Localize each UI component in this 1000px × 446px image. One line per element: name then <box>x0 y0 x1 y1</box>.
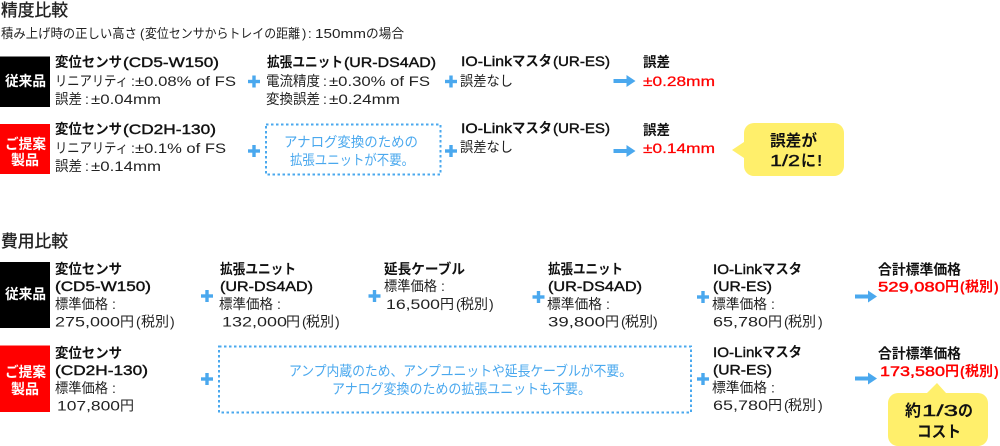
text: IO-Link master price: 標準価格 <box>712 296 767 312</box>
text: measurement condition: 積み上げ時の正しい高さ <box>1 26 137 41</box>
text: IO-Link master: マスタ <box>512 53 552 69</box>
text: extension cable price <box>384 261 494 312</box>
label: conventional product: 従来品 <box>5 73 46 89</box>
text: sensor CD5-W150: 誤差 <box>55 91 82 107</box>
callout: error halved: 1/2 <box>770 153 800 170</box>
callout: about one third of the cost: 約 <box>905 402 921 420</box>
text: expansion unit price <box>219 261 340 330</box>
text: sensor price: ) <box>170 314 175 330</box>
panel: cost, conventional row <box>0 261 999 330</box>
text: sensor price: 変位センサ <box>55 345 122 361</box>
text: sensor CD2H-130: 変位センサ <box>55 121 122 137</box>
text: sensor CD2H-130: リニアリティ <box>55 140 128 156</box>
result: total price 173,580: ) <box>994 363 999 379</box>
icon: plus <box>445 145 457 157</box>
result: total price 529,080: 税別 <box>965 278 993 294</box>
result: total price 529,080: 529,080 <box>878 278 945 294</box>
callout: about one third of the cost: 1/3 <box>922 403 958 420</box>
icon: arrow <box>855 290 877 302</box>
text: IO-Link master price: マスタ <box>762 344 802 360</box>
text: expansion unit price: 円 <box>605 314 619 330</box>
text: sensor CD5-W150: リニアリティ <box>55 73 128 89</box>
text: IO-Link master price: : <box>771 296 775 312</box>
label: proposed product: ご提案 <box>5 136 46 152</box>
text: expansion unit price: ( <box>621 314 626 330</box>
text: sensor price: (CD5-W150) <box>55 278 151 294</box>
label: conventional product <box>0 262 50 328</box>
icon: plus <box>368 290 380 302</box>
text: sensor price: 標準価格 <box>55 380 108 396</box>
text: expansion unit UR-DS4AD: : <box>323 73 327 89</box>
icon: plus <box>445 76 457 88</box>
text: expansion unit UR-DS4AD <box>266 54 436 107</box>
text: sensor CD2H-130: 誤差 <box>55 158 82 174</box>
text: sensor CD2H-130: ±0.1% of FS <box>135 140 226 156</box>
text: extension cable price: 円 <box>440 296 454 312</box>
text: expansion unit UR-DS4AD: (UR-DS4AD) <box>344 54 436 70</box>
text: sensor CD2H-130: ±0.14mm <box>91 158 161 174</box>
text: sensor price: (CD2H-130) <box>55 362 148 378</box>
text: IO-Link master: IO-Link <box>461 120 513 136</box>
text: sensor CD5-W150: (CD5-W150) <box>123 54 219 70</box>
text: IO-Link master price: 円 <box>768 397 782 413</box>
result: total price 529,080: 円 <box>945 278 959 294</box>
result: total price 529,080 <box>878 262 999 294</box>
text: IO-Link master: (UR-ES) <box>553 53 610 69</box>
text: IO-Link master price <box>712 261 823 330</box>
text: measurement condition: 150mm <box>315 26 366 41</box>
result: error 0.14mm <box>643 122 715 156</box>
result: total price 173,580: 円 <box>945 363 959 379</box>
callout: about one third of the cost: コスト <box>917 424 961 441</box>
text: expansion unit price: (UR-DS4AD) <box>220 278 313 294</box>
text: sensor price: 円 <box>120 314 134 330</box>
text: IO-Link master price: 標準価格 <box>712 380 767 396</box>
text: sensor CD5-W150: ±0.04mm <box>91 91 161 107</box>
icon: plus <box>697 291 709 303</box>
result: total price 173,580: 税別 <box>965 363 993 379</box>
text: sensor price: 107,800 <box>57 398 120 414</box>
text: extension cable price: 標準価格 <box>384 278 437 294</box>
text: IO-Link master price: ) <box>818 397 823 413</box>
text: expansion unit price: 39,800 <box>548 314 605 330</box>
result: total price 173,580 <box>878 346 999 379</box>
label: conventional product: 従来品 <box>5 286 46 302</box>
text: IO-Link master: 誤差なし <box>460 139 513 155</box>
text: expansion unit price: ( <box>302 314 307 330</box>
text: IO-Link master: 誤差なし <box>460 73 513 89</box>
text: IO-Link master: マスタ <box>512 120 552 136</box>
result: total price 173,580: 合計標準価格 <box>878 346 961 362</box>
text: sensor CD2H-130 <box>55 121 226 174</box>
text: IO-Link master <box>460 53 610 89</box>
result: total price 529,080: ( <box>960 278 965 294</box>
icon: arrow <box>855 372 877 384</box>
callout: amp unit and cable not required: アナログ変換のための拡張ユニットも不要。 <box>332 381 591 397</box>
callout: about one third of the cost <box>888 383 988 446</box>
callout: error halved: 誤差が <box>770 131 817 150</box>
result: error 0.14mm: ±0.14mm <box>643 140 715 156</box>
text: sensor CD5-W150: : <box>85 91 89 107</box>
text: sensor CD2H-130: : <box>85 158 89 174</box>
text: measurement condition: 変位センサからトレイの距離 <box>145 26 300 41</box>
text: expansion unit UR-DS4AD: ±0.24mm <box>329 91 400 107</box>
result: error 0.14mm: 誤差 <box>643 122 670 138</box>
text: expansion unit price: 132,000 <box>222 314 287 330</box>
text: sensor CD2H-130: : <box>131 140 135 156</box>
text: expansion unit price: (UR-DS4AD) <box>548 278 642 294</box>
text: expansion unit UR-DS4AD: 拡張ユニット <box>267 54 343 70</box>
text: expansion unit price: ) <box>653 314 658 330</box>
text: sensor CD5-W150 <box>55 54 236 107</box>
callout: expansion unit not required <box>266 124 440 174</box>
text: sensor price <box>55 261 175 330</box>
text: sensor CD5-W150: : <box>131 73 135 89</box>
text: expansion unit price: 円 <box>286 314 300 330</box>
icon: plus <box>201 290 213 302</box>
label: proposed product: 製品 <box>11 381 39 397</box>
text: expansion unit price: : <box>277 296 281 312</box>
text: sensor CD5-W150: 変位センサ <box>55 54 122 70</box>
text: IO-Link master: (UR-ES) <box>553 120 610 136</box>
icon: arrow <box>614 145 636 157</box>
text: sensor CD5-W150: ±0.08% of FS <box>135 73 236 89</box>
callout: error halved: ! <box>817 153 822 170</box>
text: expansion unit UR-DS4AD: 変換誤差 <box>266 91 320 107</box>
icon: arrow <box>614 75 636 87</box>
callout: expansion unit not required: 拡張ユニットが不要。 <box>290 152 414 168</box>
text: expansion unit UR-DS4AD: 電流精度 <box>266 73 320 89</box>
text: extension cable price: : <box>441 278 445 294</box>
text: measurement condition: : <box>308 26 312 41</box>
text: IO-Link master price: (UR-ES) <box>713 278 772 294</box>
text: sensor price: : <box>112 296 116 312</box>
text: expansion unit price: 標準価格 <box>219 296 273 312</box>
result: total price 173,580: ( <box>960 363 965 379</box>
text: IO-Link master price: ( <box>784 314 789 330</box>
text: IO-Link master price: IO-Link <box>713 344 763 360</box>
text: IO-Link master price: (UR-ES) <box>713 362 772 378</box>
callout: error halved <box>732 123 844 176</box>
text: extension cable price: 税別 <box>460 296 488 312</box>
heading: cost comparison: 費用比較 <box>1 232 68 251</box>
text: IO-Link master price: マスタ <box>762 261 802 277</box>
text: IO-Link master price: 65,780 <box>713 314 768 330</box>
callout: amp unit and cable not required <box>219 346 691 412</box>
callout: error halved: に <box>801 153 816 170</box>
text: sensor price: 円 <box>120 398 134 414</box>
text: extension cable price: 延長ケーブル <box>384 261 465 277</box>
text: sensor CD2H-130: (CD2H-130) <box>123 121 216 137</box>
text: sensor price: 税別 <box>141 314 169 330</box>
text: expansion unit price: 税別 <box>625 314 653 330</box>
text: IO-Link master price: IO-Link <box>713 261 763 277</box>
text: sensor price <box>55 345 148 414</box>
text: IO-Link master price: ( <box>784 397 789 413</box>
callout: expansion unit not required: アナログ変換のための <box>284 134 418 150</box>
label: proposed product <box>0 124 50 174</box>
callout: amp unit and cable not required: アンプ内蔵のため、アンプユニットや延長ケーブルが不要。 <box>289 363 632 379</box>
text: IO-Link master price: ) <box>818 314 823 330</box>
result: total price 529,080: ) <box>994 278 999 294</box>
text: IO-Link master price: 税別 <box>788 397 816 413</box>
heading: accuracy comparison: 精度比較 <box>1 1 68 20</box>
text: IO-Link master <box>460 120 610 155</box>
result: error 0.28mm: ±0.28mm <box>643 73 715 89</box>
text: sensor price: 変位センサ <box>55 261 122 277</box>
result: total price 529,080: 合計標準価格 <box>878 262 961 278</box>
text: IO-Link master price: 税別 <box>788 314 816 330</box>
text: expansion unit price: 税別 <box>306 314 334 330</box>
text: measurement condition: ) <box>302 26 306 41</box>
text: expansion unit price <box>547 261 658 330</box>
text: expansion unit price: 拡張ユニット <box>220 261 296 277</box>
text: sensor price: 標準価格 <box>55 296 108 312</box>
label: proposed product <box>0 346 50 412</box>
panel: accuracy, conventional row <box>0 53 715 107</box>
text: extension cable price: ( <box>456 296 461 312</box>
panel: cost, proposed row <box>0 344 999 446</box>
panel: accuracy, proposed row <box>0 120 844 176</box>
text: expansion unit price: 標準価格 <box>547 296 602 312</box>
text: expansion unit UR-DS4AD: : <box>323 91 327 107</box>
icon: plus <box>248 145 260 157</box>
icon: plus <box>248 76 260 88</box>
label: proposed product: ご提案 <box>5 364 46 380</box>
text: measurement condition: ( <box>140 26 145 41</box>
text: expansion unit price: ) <box>335 314 340 330</box>
result: error 0.28mm <box>643 54 715 89</box>
text: sensor price: 275,000 <box>55 314 120 330</box>
text: measurement condition: の場合 <box>366 26 404 41</box>
text: IO-Link master price: : <box>771 380 775 396</box>
text: expansion unit price: : <box>606 296 610 312</box>
result: error 0.28mm: 誤差 <box>643 54 670 70</box>
text: expansion unit price: 拡張ユニット <box>548 261 623 277</box>
text: sensor price: : <box>112 380 116 396</box>
text: extension cable price: 16,500 <box>386 296 440 312</box>
text: IO-Link master price: 円 <box>768 314 782 330</box>
text: sensor price: ( <box>136 314 141 330</box>
icon: plus <box>697 373 709 385</box>
text: IO-Link master: IO-Link <box>461 53 513 69</box>
result: total price 173,580: 173,580 <box>880 363 945 379</box>
text: extension cable price: ) <box>489 296 494 312</box>
callout: about one third of the cost: の <box>958 403 973 420</box>
label: proposed product: 製品 <box>11 152 39 168</box>
text: IO-Link master price: 65,780 <box>713 397 768 413</box>
icon: plus <box>201 373 213 385</box>
text: expansion unit UR-DS4AD: ±0.30% of FS <box>329 73 430 89</box>
label: conventional product <box>0 56 50 107</box>
text: IO-Link master price <box>712 344 823 413</box>
icon: plus <box>532 291 544 303</box>
